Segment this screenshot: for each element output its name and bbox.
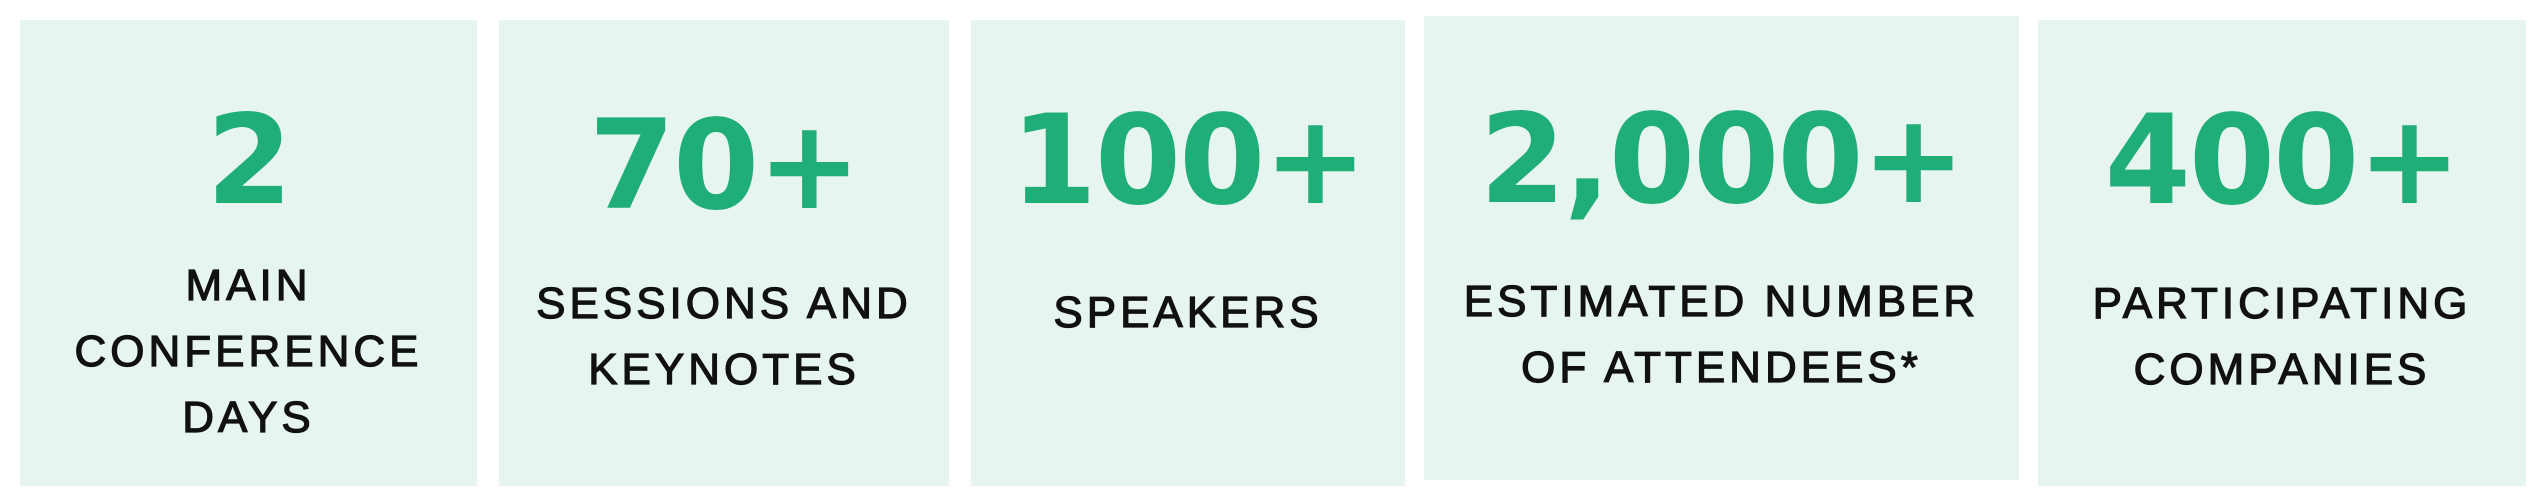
label: main conference days [74, 261, 423, 442]
label: sessions and keynotes: SESSIONS AND [536, 279, 912, 328]
number: 2,000+: 2,000+ [1479, 88, 1964, 232]
label: participating companies: PARTICIPATING [2093, 279, 2471, 328]
number: 400+: 400+ [2105, 89, 2459, 233]
label: main conference days: MAIN [186, 261, 312, 310]
panel: sessions and keynotes [499, 20, 949, 486]
number: 2: 2 [206, 89, 291, 233]
panel: estimated number of attendees [1424, 16, 2019, 480]
panel: participating companies [2038, 20, 2526, 486]
label: main conference days: CONFERENCE [74, 327, 423, 376]
number: 100+: 100+ [1011, 89, 1365, 233]
panel: speakers [971, 20, 1405, 486]
label: main conference days: DAYS [182, 393, 315, 442]
label: participating companies: COMPANIES [2134, 345, 2430, 394]
number: 70+: 70+ [589, 94, 859, 238]
label: estimated number of attendees: ESTIMATED NUMBER [1464, 277, 1979, 326]
label: sessions and keynotes: KEYNOTES [588, 345, 860, 394]
label: speakers: SPEAKERS [1053, 288, 1323, 337]
panel: main conference days [20, 20, 477, 486]
label: estimated number of attendees [1464, 277, 1979, 392]
label: participating companies [2093, 279, 2471, 394]
label: estimated number of attendees: OF ATTENDEES* [1521, 343, 1922, 392]
label: sessions and keynotes [536, 279, 912, 394]
